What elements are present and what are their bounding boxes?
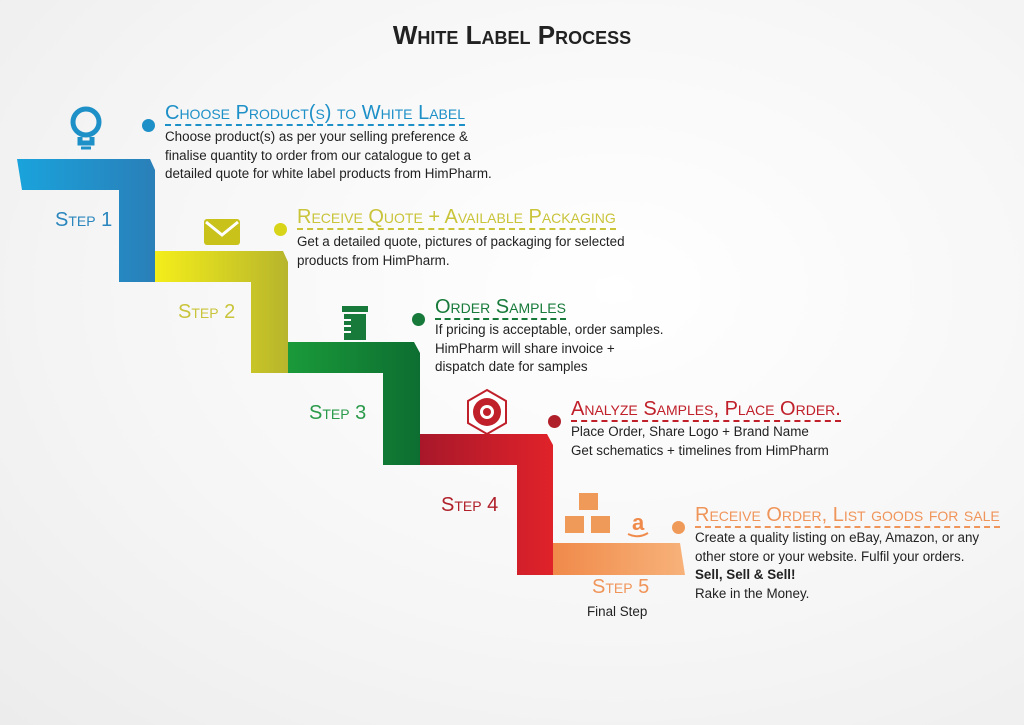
step 3 text: dispatch date for samples: [435, 359, 588, 374]
step 5 text: other store or your website. Fulfil your orders.: [695, 548, 964, 564]
step 1 text: Choose product(s) as per your selling preference &: [165, 129, 468, 144]
step 2 text: products from HimPharm.: [297, 252, 450, 268]
text: Step 3: [309, 402, 366, 424]
icon: amazon: a: [632, 510, 645, 535]
step 2 shape: [155, 251, 288, 373]
text: Final Step: [587, 604, 647, 619]
step 2 text: Receive Quote + Available Packaging: [297, 206, 616, 228]
icon: sample jar: [342, 306, 368, 340]
icon: hexagon badge: [468, 390, 506, 434]
step 5 text: Rake in the Money.: [695, 586, 809, 600]
step 1 text: finalise quantity to order from our catalogue to get a: [165, 148, 471, 162]
text: Step 4: [441, 494, 498, 516]
step 4 text: Place Order, Share Logo + Brand Name: [571, 424, 809, 439]
icon: amazon: [628, 510, 648, 536]
step 2 text: Get a detailed quote, pictures of packaging for selected: [297, 234, 625, 249]
step 4 shape: [420, 434, 553, 575]
step 5 shape: [553, 543, 685, 575]
step 5 text: Sell, Sell & Sell!: [695, 567, 795, 582]
step 1 text: [142, 102, 492, 181]
step 3 text: Order Samples: [435, 296, 566, 318]
step 1 text: Choose Product(s) to White Label: [165, 102, 465, 124]
step 5 text: Receive Order, List goods for sale: [695, 504, 1000, 526]
step 3 text: [412, 296, 664, 374]
icon: envelope: [204, 219, 240, 245]
text: Step 5: [592, 576, 649, 598]
text: Step 2: [178, 301, 235, 323]
title: White Label Process: [393, 20, 631, 50]
step 1 text: detailed quote for white label products from HimPharm.: [165, 166, 492, 181]
step 1 shape: [17, 159, 155, 282]
step 5 text: Create a quality listing on eBay, Amazon, or any: [695, 530, 979, 545]
step 3 shape: [288, 342, 420, 465]
step 3 text: HimPharm will share invoice +: [435, 340, 615, 356]
step 4 text: [548, 398, 841, 458]
icon: boxes: [565, 493, 610, 533]
step 4 text: Get schematics + timelines from HimPharm: [571, 442, 829, 458]
step 3 text: If pricing is acceptable, order samples.: [435, 322, 664, 337]
step 4 text: Analyze Samples, Place Order.: [571, 398, 841, 420]
step 5 text: [672, 504, 1000, 601]
icon: lightbulb: [73, 109, 99, 148]
step 2 text: [274, 206, 625, 268]
step labels: Step 1: [55, 209, 112, 231]
